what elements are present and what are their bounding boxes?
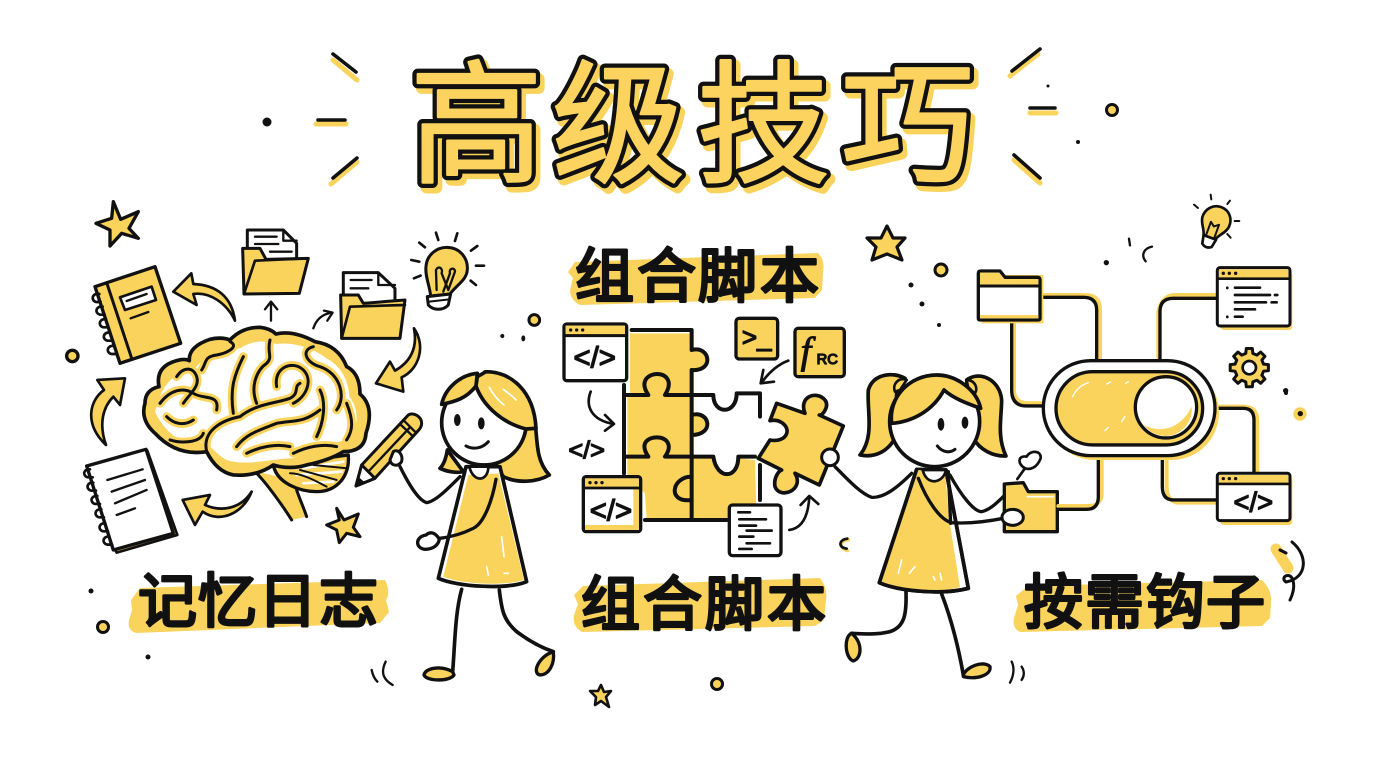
sparks: [1129, 239, 1152, 261]
label: 组合脚本 top: 组合脚本: [575, 244, 819, 310]
face: [454, 414, 488, 448]
illustration canvas: [65, 47, 1307, 708]
brain stem and cerebellum: [257, 455, 348, 520]
small ring: [67, 350, 78, 362]
label highlight: memory log: [129, 580, 389, 633]
code window bottom left: [583, 477, 641, 532]
bangs: [442, 372, 536, 429]
title: 高级技巧: [410, 53, 974, 201]
small star bottom: [590, 685, 611, 707]
decorative stars and dots: [88, 226, 1288, 707]
connector lines: [1012, 297, 1254, 509]
raised arm: [400, 467, 460, 503]
code document: [729, 505, 781, 556]
motion lines: [372, 662, 393, 685]
terminal icon: >_: [742, 322, 772, 352]
right leg and foot: [942, 594, 990, 678]
arrow: folder to brain: [376, 328, 420, 392]
arrow to puzzle: [589, 392, 614, 431]
head: [890, 377, 980, 467]
brain fold halos: [160, 340, 352, 453]
character: girl with long hair: [372, 372, 554, 685]
function icon: f: [801, 330, 817, 372]
arrow: notes to notebook: [91, 378, 125, 445]
folder tab line: [1027, 494, 1053, 499]
left pigtail: [860, 375, 905, 456]
motion lines: [1010, 662, 1024, 683]
decorative ring and dots: [500, 315, 540, 341]
bangs: [891, 375, 981, 423]
toggle switch: [1043, 361, 1219, 460]
face: [937, 417, 968, 452]
rings and dots: [88, 264, 1288, 690]
sprout above folder: [1017, 452, 1041, 479]
window top right: [1217, 268, 1292, 330]
arrow up to folder: [265, 302, 277, 321]
dots right: [1283, 388, 1307, 421]
floating puzzle piece: [758, 395, 843, 493]
label: 按需钩子: 按需钩子: [1024, 570, 1265, 636]
title sunburst rays: [262, 49, 1118, 184]
star top left: [96, 202, 138, 246]
folder top left: [978, 271, 1043, 323]
code window bottom left: </>: [590, 495, 632, 528]
panel: puzzle scripts illustration: [564, 318, 848, 556]
head: [442, 380, 526, 465]
right pigtail: [967, 376, 1006, 456]
hook doodle: [1276, 542, 1303, 600]
held folder: [1004, 483, 1057, 532]
right leg and foot: [499, 590, 554, 675]
curl stroke: [840, 539, 847, 549]
label highlight: scripts top: [568, 253, 823, 305]
brain highlights: [155, 342, 357, 463]
hair ties: [894, 379, 976, 393]
hair shine: [489, 387, 516, 405]
code window top left: [564, 324, 627, 381]
dot: [1104, 260, 1109, 265]
arrow from function icon: [761, 361, 788, 383]
small light bulb: [1193, 202, 1234, 252]
puzzle outlines: [624, 330, 760, 520]
connector shadows: [1014, 295, 1257, 506]
star near puzzle: [867, 226, 905, 260]
lower arm and hand: [418, 479, 496, 549]
yellow notebook: [93, 267, 181, 363]
light bulb icon: [411, 233, 484, 309]
star below brain: [327, 508, 360, 543]
function icon: RC: [817, 352, 838, 368]
terminal icon: [736, 318, 778, 359]
dress: [879, 469, 968, 592]
window bottom right: </>: [1234, 486, 1273, 517]
loose code tag: </>: [568, 436, 605, 464]
bulb rays: [1194, 195, 1239, 238]
lower arm: [918, 478, 1003, 523]
folder with document right: [341, 273, 405, 338]
title: 高级技巧: [410, 53, 974, 201]
pencil: [356, 414, 422, 486]
label highlight: scripts bottom: [574, 578, 826, 632]
label: 记忆日志: 记忆日志: [138, 569, 378, 635]
folder with document top: [243, 230, 308, 294]
hair back: [440, 372, 549, 481]
hand on folder: [1002, 509, 1023, 525]
cerebrum fill: [144, 327, 369, 475]
brain: [144, 327, 369, 520]
right arm: [950, 475, 1005, 512]
small curl: [841, 540, 848, 551]
arrow: brain to notes: [183, 492, 252, 525]
left leg and foot: [424, 589, 462, 680]
left arm and hand on piece: [822, 449, 912, 497]
arrow to second folder: [313, 311, 333, 328]
arrow: from brain to notebook: [173, 273, 235, 321]
white notepad: [84, 449, 177, 553]
title: 高级技巧: [414, 58, 978, 206]
label: 组合脚本 bottom: 组合脚本: [581, 572, 826, 638]
label highlight: on-demand hooks: [1014, 580, 1271, 632]
panel: memory log illustration: [67, 202, 540, 553]
left leg and foot: [846, 592, 906, 661]
arrow to floating piece: [789, 496, 818, 530]
function icon: [795, 328, 844, 377]
cerebrum outline: [144, 327, 369, 475]
character: girl with pigtails: [822, 375, 1057, 683]
puzzle yellow pieces: [627, 333, 757, 520]
brain fold lines: [160, 340, 352, 453]
code window top left: </>: [573, 341, 616, 374]
panel: on-demand hooks toggle illustration: [978, 195, 1307, 525]
gear icon: [1230, 349, 1268, 387]
dress: [438, 467, 527, 586]
window bottom right: [1217, 473, 1292, 525]
